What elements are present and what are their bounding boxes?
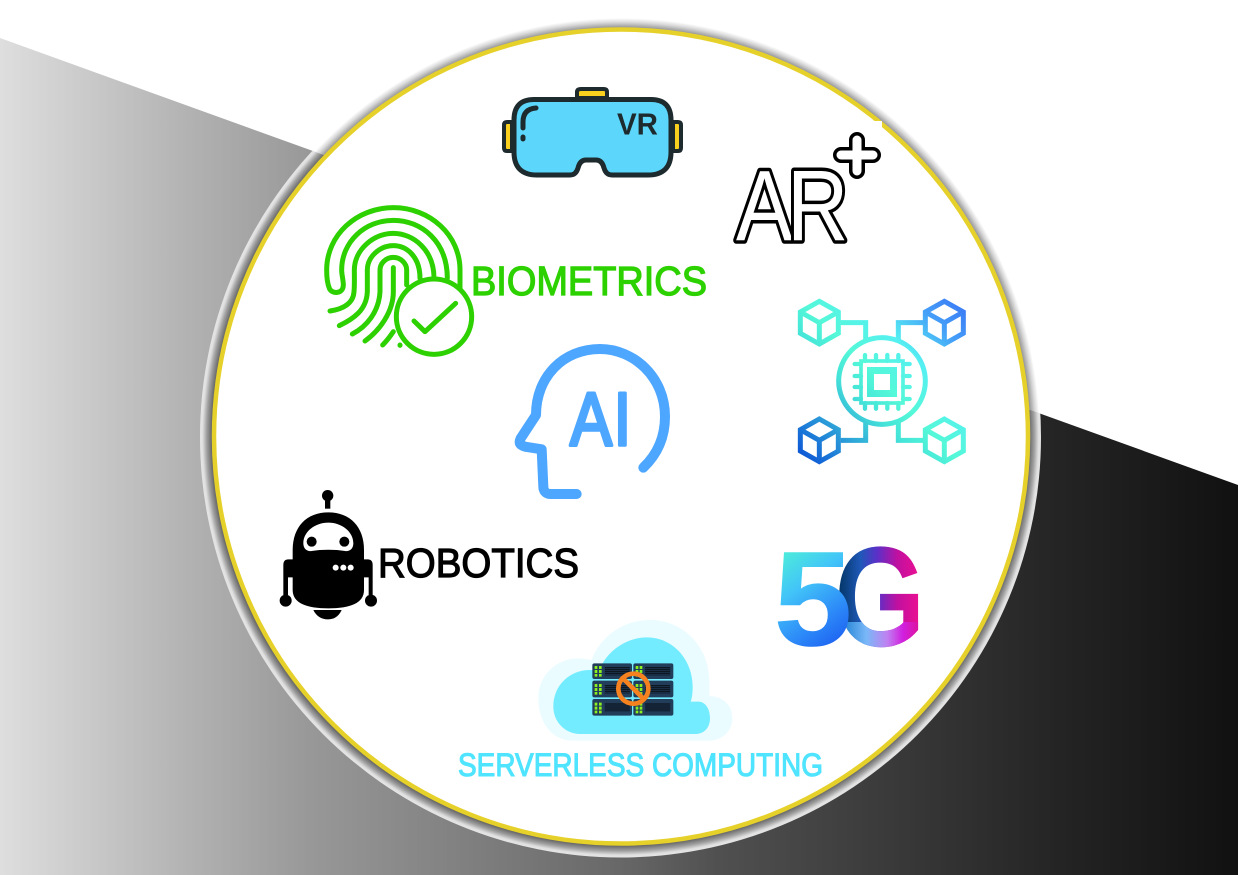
chip pins xyxy=(855,355,910,409)
cube top right xyxy=(925,301,963,344)
icon: blockchain chip network xyxy=(800,301,963,462)
cube bottom right xyxy=(925,419,963,462)
icon: fingerprint with check xyxy=(327,208,472,354)
main circle panel xyxy=(214,30,1028,844)
AR icon white backing xyxy=(728,121,882,247)
plus outline xyxy=(841,140,873,171)
plus inner xyxy=(841,140,873,171)
chip body xyxy=(861,361,903,403)
cloud fill xyxy=(553,637,710,734)
G letter: G xyxy=(836,523,924,672)
icon: AI head xyxy=(520,349,665,494)
AI label: AI xyxy=(570,377,631,461)
server racks xyxy=(592,663,673,716)
icon: VR headset xyxy=(504,89,681,175)
VR right tab xyxy=(673,122,681,151)
VR left tab xyxy=(504,122,512,151)
5 numeral: 5 xyxy=(774,525,852,674)
VR body xyxy=(514,100,671,175)
icon: AR plus xyxy=(736,140,873,262)
server LEDs xyxy=(596,666,641,713)
cloud halo xyxy=(538,620,732,741)
heading: serverless computing: SERVERLESS COMPUTING xyxy=(458,747,823,783)
icon: serverless cloud xyxy=(538,620,732,741)
AR label: AR xyxy=(736,149,848,262)
icon: robot xyxy=(280,490,377,619)
circle soft shadow on white area xyxy=(314,19,1040,414)
check badge xyxy=(396,279,472,354)
chip core xyxy=(870,370,893,393)
VR label: VR xyxy=(617,106,658,142)
chip circle xyxy=(839,338,925,424)
circle shadow ring xyxy=(200,151,1041,858)
G lower tint: G xyxy=(836,523,924,672)
heading: biometrics: BIOMETRICS xyxy=(471,258,707,304)
connectors xyxy=(841,323,923,440)
head outline xyxy=(520,349,665,494)
prohibition sign xyxy=(618,674,648,704)
cube bottom left xyxy=(800,419,838,462)
VR top strap xyxy=(577,89,607,98)
VR lens highlight xyxy=(523,108,536,139)
check mark xyxy=(414,303,456,332)
icon: 5G xyxy=(778,546,918,648)
heading: robotics: ROBOTICS xyxy=(378,540,579,586)
server vents xyxy=(617,667,658,712)
cube top left xyxy=(800,301,838,344)
